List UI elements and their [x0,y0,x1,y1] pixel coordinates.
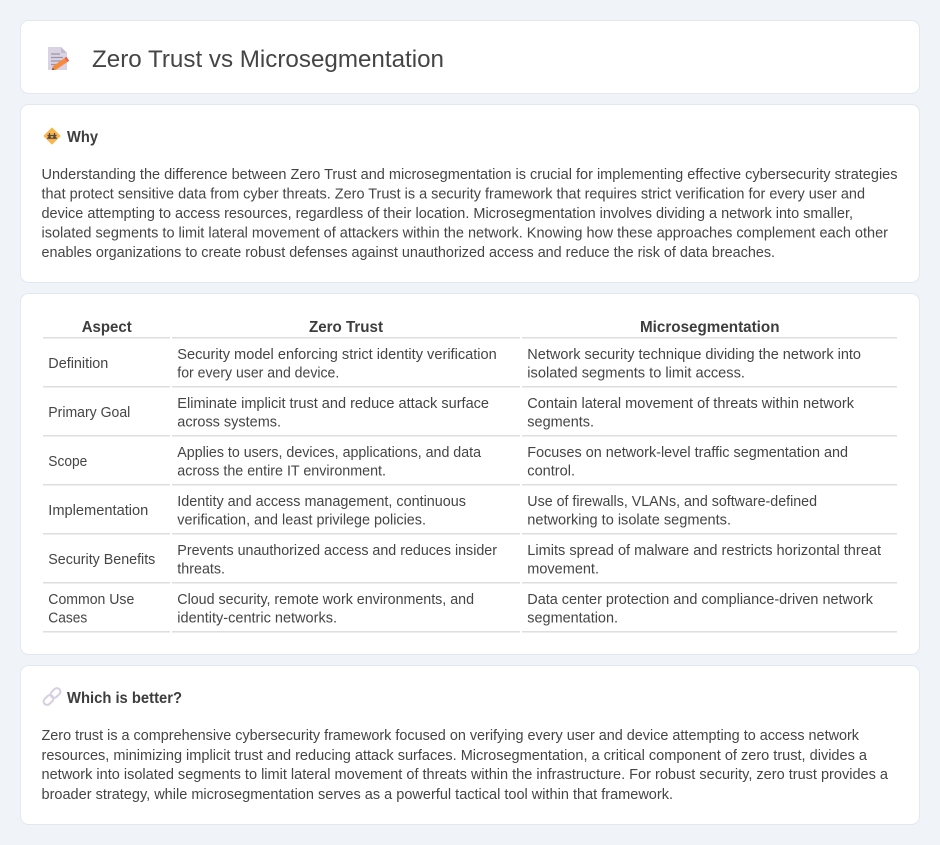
table row: implementation: verification, and least privilege policies. [177,512,426,528]
table header row [43,319,897,338]
table row: scope: Scope [48,454,87,470]
text block: why body: enables organizations to create robust defenses against unauthorized access and reduce the risk of data breaches. [42,245,775,261]
table row: implementation: Implementation [48,503,148,519]
panel: why [20,104,920,282]
table row: primary goal: Primary Goal [48,405,130,421]
table row: definition: for every user and device. [177,365,339,381]
heading: why: Why [67,129,98,146]
panel: comparison table [20,294,920,654]
text block: which is better body: resources, minimizing implicit trust and reducing attack surfaces. Microsegmentation, a critical component of zero trust, divides a [42,748,867,764]
table row: definition: Network security technique dividing the network into [527,347,861,363]
icon: chain link [42,687,62,706]
text block: which is better body: Zero trust is a comprehensive cybersecurity framework focused on verifying every user and device attempting to access network [42,728,860,744]
text block: why body: isolated segments to limit lateral movement of attackers within the network. Knowing how these approaches complement each other [42,226,888,242]
table row: common use cases: Cloud security, remote work environments, and [177,592,474,608]
table row: common use cases: Data center protection and compliance-driven network [527,592,874,608]
table row: primary goal: Eliminate implicit trust and reduce attack surface [177,396,489,412]
table row: scope: Applies to users, devices, applications, and data [177,445,481,461]
table row: definition: Security model enforcing strict identity verification [177,347,497,363]
table row: common use cases: Common Use [48,592,134,608]
table row: primary goal: across systems. [177,414,281,430]
table row: security benefits: threats. [177,561,225,577]
heading: which is better: Which is better? [67,690,182,707]
table row: common use cases [43,592,897,632]
table row: implementation [43,494,897,534]
table row: primary goal: Contain lateral movement of threats within network [527,396,855,412]
table header row: Aspect [82,319,132,336]
table row: common use cases: Cases [48,610,87,626]
icon: document with pencil [48,47,69,70]
table row: definition: Definition [48,356,108,372]
table row: implementation: Identity and access management, continuous [177,494,466,510]
table row: security benefits: movement. [527,561,599,577]
table row: security benefits: Prevents unauthorized access and reduces insider [177,543,497,559]
table row: scope: Focuses on network-level traffic segmentation and [527,445,848,461]
text block: why body: Understanding the difference between Zero Trust and microsegmentation is crucial for implementing effective cybersecurity strategies [42,167,898,183]
table row: security benefits: Limits spread of malware and restricts horizontal threat [527,543,881,559]
text block: which is better body: broader strategy, while microsegmentation serves as a powerful tactical tool within that framework. [42,787,673,803]
table header row: Zero Trust [309,319,384,336]
table row: scope: across the entire IT environment. [177,463,386,479]
table row: security benefits: Security Benefits [48,552,155,568]
table row: common use cases: segmentation. [527,610,618,626]
table row: scope [43,445,897,486]
table row: implementation: networking to isolate segments. [527,512,731,528]
text block: why body [42,167,898,261]
table row: common use cases: identity-centric networks. [177,610,337,626]
table row: definition: isolated segments to limit access. [527,365,745,381]
table row: implementation: Use of firewalls, VLANs, and software-defined [527,494,817,510]
text block: why body: device attempting to access resources, regardless of their location. Microsegmentation involves dividing a network into smaller, [42,206,853,222]
table row: primary goal [43,396,897,436]
text block: which is better body: network into isolated segments to limit lateral movement of threats within the infrastructure. For robust security, zero trust provides a [42,767,888,783]
text block: which is better body [42,728,888,803]
table row: primary goal: segments. [527,414,594,430]
title: Zero Trust vs Microsegmentation [92,46,444,73]
text block: why body: that protect sensitive data from cyber threats. Zero Trust is a security framework that requires strict verification for every user and [42,187,865,203]
panel: title header [20,20,920,94]
table row: security benefits [43,543,897,584]
table row: scope: control. [527,463,575,479]
icon: warning diamond [44,128,60,144]
table header row: Microsegmentation [640,319,780,336]
table row: definition [43,347,897,388]
panel: which is better [20,666,920,824]
